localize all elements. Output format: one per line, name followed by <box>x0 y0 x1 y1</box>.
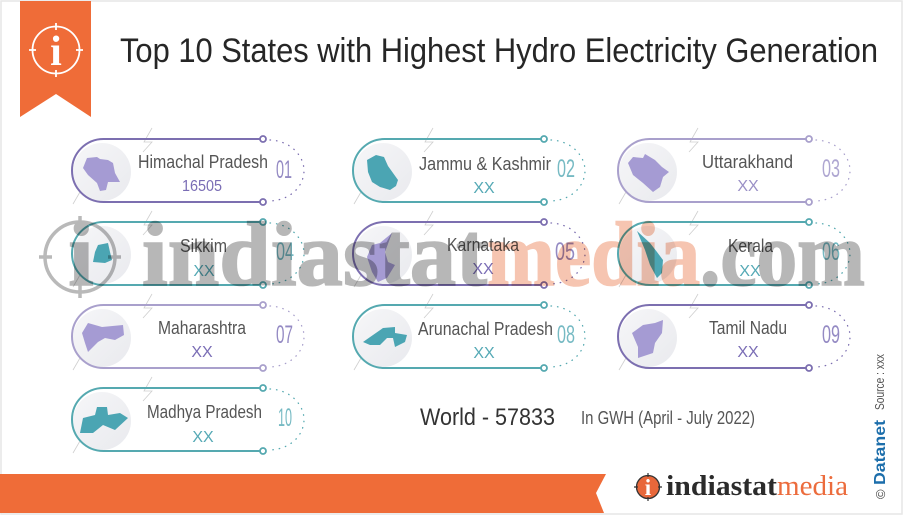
card 4: Sikkim <box>72 211 304 288</box>
card 7: Maharashtra <box>72 294 304 371</box>
card 3: Uttarakhand: Uttarakhand <box>702 152 793 172</box>
card 9: Tamil Nadu: XX <box>737 344 759 361</box>
card 1: Himachal Pradesh: 01 <box>276 156 292 184</box>
card 8: Arunachal Pradesh: Arunachal Pradesh <box>418 319 553 339</box>
source credit: Datanet <box>872 420 889 485</box>
watermark: i <box>68 204 94 305</box>
card 3: Uttarakhand: 03 <box>822 155 840 183</box>
card 5: Karnataka: 05 <box>555 238 575 266</box>
card 10: Madhya Pradesh <box>72 377 304 454</box>
card 9: Tamil Nadu <box>618 294 850 371</box>
card 2: Jammu & Kashmir <box>353 128 585 205</box>
card 4: Sikkim: XX <box>193 263 215 280</box>
card 2: Jammu & Kashmir: Jammu & Kashmir <box>419 154 551 174</box>
card 10: Madhya Pradesh: XX <box>192 429 214 446</box>
source credit <box>872 353 889 499</box>
card 5: Karnataka <box>353 211 585 288</box>
ribbon icon: i <box>50 29 62 75</box>
card 3: Uttarakhand: XX <box>737 178 759 195</box>
watermark: indiastat <box>142 204 487 305</box>
card 1: Himachal Pradesh: Himachal Pradesh <box>138 152 268 172</box>
watermark <box>39 204 865 305</box>
card 5: Karnataka: XX <box>472 261 494 278</box>
card 8: Arunachal Pradesh <box>353 294 585 371</box>
card 7: Maharashtra: 07 <box>276 321 293 349</box>
source credit: © <box>873 489 888 499</box>
source credit: Source : xxx <box>873 353 887 410</box>
card 2: Jammu & Kashmir: XX <box>473 180 495 197</box>
footer logo: indiastat <box>666 470 777 502</box>
footer logo <box>634 470 848 502</box>
card 3: Uttarakhand <box>618 128 850 205</box>
card 10: Madhya Pradesh: 10 <box>278 404 292 432</box>
card 9: Tamil Nadu: Tamil Nadu <box>709 318 787 338</box>
card 5: Karnataka: Karnataka <box>447 235 520 255</box>
card 7: Maharashtra: XX <box>191 344 213 361</box>
card 6: Kerala: XX <box>739 263 761 280</box>
unit note: In GWH (April - July 2022) <box>581 408 755 428</box>
watermark: .com <box>700 204 865 305</box>
card 6: Kerala: 06 <box>822 238 840 266</box>
card 1: Himachal Pradesh: 16505 <box>182 178 222 195</box>
world total: World - 57833 <box>420 404 555 431</box>
ribbon icon <box>20 1 91 117</box>
card 7: Maharashtra: Maharashtra <box>158 318 247 338</box>
card 1: Himachal Pradesh <box>72 128 304 205</box>
card 6: Kerala: Kerala <box>728 236 774 256</box>
card 2: Jammu & Kashmir: 02 <box>557 155 575 183</box>
card 10: Madhya Pradesh: Madhya Pradesh <box>147 402 262 422</box>
card 8: Arunachal Pradesh: 08 <box>557 321 575 349</box>
card 6: Kerala <box>618 211 850 288</box>
card 4: Sikkim: Sikkim <box>180 236 227 256</box>
footer band <box>0 474 606 513</box>
card 9: Tamil Nadu: 09 <box>822 321 840 349</box>
card 4: Sikkim: 04 <box>276 238 294 266</box>
footer logo: i <box>645 475 652 500</box>
watermark: media <box>487 204 700 305</box>
card 8: Arunachal Pradesh: XX <box>473 345 495 362</box>
footer logo: media <box>777 470 848 502</box>
